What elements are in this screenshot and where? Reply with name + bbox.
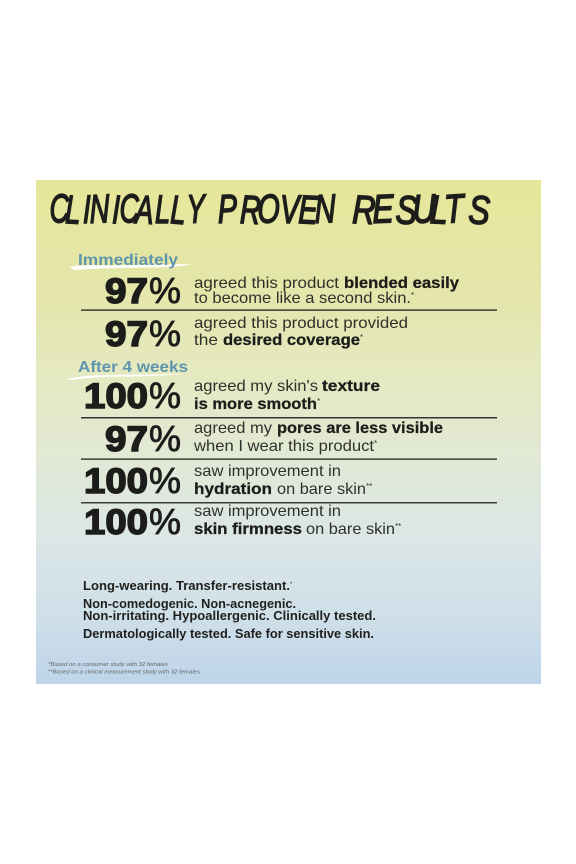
stat row: 97% blended easily: to become like a second skin. bbox=[194, 290, 411, 307]
stat row: 97% desired coverage bbox=[105, 313, 408, 354]
claims text block: Non-comedogenic. Non-acnegenic. bbox=[83, 597, 296, 611]
stat row: 97% pores: pores are less visible bbox=[277, 420, 443, 437]
heading: After 4 weeks: After 4 weeks bbox=[78, 359, 188, 376]
stat row: 100% texture: is more smooth bbox=[194, 396, 317, 413]
stat row: 100% hydration bbox=[84, 460, 372, 501]
footnotes: *Based on a consumer study with 32 females bbox=[48, 662, 169, 668]
claims text block bbox=[83, 579, 376, 641]
panel: gradient background bbox=[36, 180, 541, 684]
stat row: 100% skin firmness bbox=[84, 501, 401, 542]
stat row: 97% pores: 97 bbox=[105, 420, 148, 459]
stat row: 97% blended easily: % bbox=[149, 270, 181, 311]
stat row: 97% pores: * bbox=[374, 439, 377, 448]
stat row: 97% pores: when I wear this product bbox=[193, 438, 375, 455]
footnotes bbox=[48, 662, 201, 676]
stat row: 100% texture bbox=[84, 375, 380, 416]
stat row: 97% desired coverage: 97 bbox=[105, 315, 148, 354]
stat row: 100% hydration: 100 bbox=[84, 462, 148, 501]
stat row: 100% hydration: ** bbox=[366, 482, 372, 491]
title bbox=[49, 185, 491, 234]
stat row: 100% skin firmness: % bbox=[149, 501, 181, 542]
stat row: 97% desired coverage: the bbox=[194, 332, 218, 349]
stat row: 100% texture: 100 bbox=[84, 377, 148, 416]
stat row: 100% hydration: % bbox=[149, 460, 181, 501]
claims text block: Non-irritating. Hypoallergenic. Clinically tested. bbox=[83, 609, 376, 623]
stat row: 100% texture: * bbox=[317, 397, 320, 406]
claims text block: Long-wearing. Transfer-resistant. bbox=[83, 579, 290, 593]
stat row: 100% skin firmness: saw improvement in bbox=[194, 503, 341, 520]
stat row: 97% blended easily: agreed this product bbox=[194, 275, 340, 292]
title: CLINICALLY bbox=[49, 186, 207, 234]
footnotes: **Based on a clinical measurement study with 32 females bbox=[48, 670, 201, 676]
stat row: 97% pores: % bbox=[149, 418, 181, 459]
heading: Immediately: Immediately bbox=[78, 252, 178, 269]
claims text block: * bbox=[290, 582, 293, 588]
stat row: 100% hydration: saw improvement in bbox=[194, 463, 341, 480]
stat row: 97% pores: agreed my bbox=[194, 420, 272, 437]
stat row: 100% texture: texture bbox=[322, 378, 380, 395]
stat row: 97% blended easily bbox=[105, 270, 459, 311]
stat row: 97% blended easily: 97 bbox=[105, 272, 148, 311]
stat row: 97% desired coverage: desired coverage bbox=[223, 332, 360, 349]
stat row: 100% texture: % bbox=[149, 375, 181, 416]
stat row: 97% blended easily: blended easily bbox=[344, 275, 459, 292]
stat row: 97% pores bbox=[105, 418, 443, 459]
stat row: 97% blended easily: * bbox=[411, 291, 414, 300]
stat row: 97% desired coverage: agreed this product provided bbox=[194, 315, 408, 332]
stat row: 100% hydration: hydration bbox=[194, 481, 272, 498]
stat row: 100% hydration: on bare skin bbox=[277, 481, 366, 498]
stat row: 100% skin firmness: skin firmness bbox=[194, 521, 302, 538]
stat row: 97% desired coverage: * bbox=[360, 333, 363, 342]
stat row: 100% skin firmness: 100 bbox=[84, 503, 148, 542]
stat row: 100% skin firmness: on bare skin bbox=[306, 521, 395, 538]
stat row: 100% texture: agreed my skin's bbox=[194, 378, 318, 395]
title: PROVEN bbox=[217, 186, 337, 233]
stat row: 100% skin firmness: ** bbox=[395, 522, 401, 531]
title: RESULTS bbox=[352, 185, 491, 233]
stat row: 97% desired coverage: % bbox=[149, 313, 181, 354]
claims text block: Dermatologically tested. Safe for sensitive skin. bbox=[83, 627, 374, 641]
heading: After 4 weeks bbox=[66, 359, 188, 380]
